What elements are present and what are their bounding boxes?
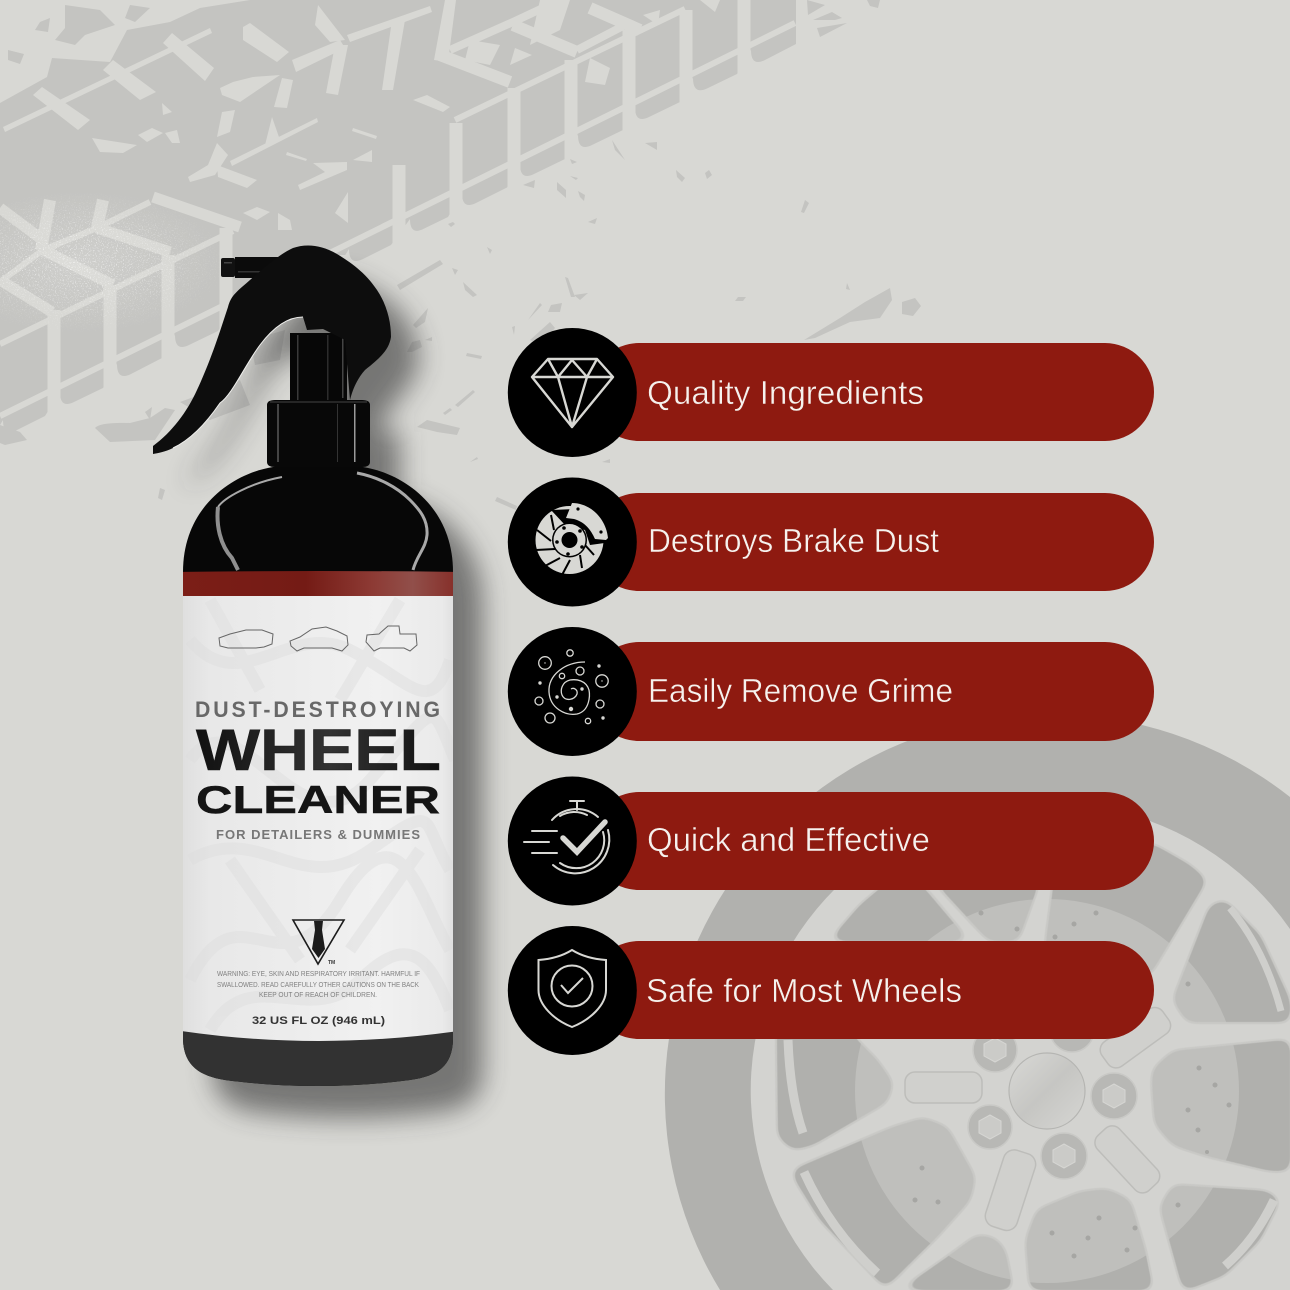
bottle base bbox=[183, 1031, 453, 1086]
wheel background bbox=[660, 714, 1290, 1290]
tire bbox=[665, 714, 1290, 1290]
product bottle bbox=[153, 246, 465, 1100]
volume text: 32 US FL OZ (946 mL) bbox=[252, 1015, 385, 1027]
rim lip bbox=[751, 802, 1290, 1290]
feature: quick and effective: Quick and Effective bbox=[647, 821, 930, 858]
coupe bbox=[290, 627, 348, 651]
light fog patch bbox=[0, 180, 240, 345]
tire track background bbox=[0, 0, 921, 510]
icon: shield check bbox=[538, 950, 606, 1027]
feature: safe for most wheels: Safe for Most Wheels bbox=[646, 972, 962, 1009]
label heading bbox=[195, 697, 443, 842]
feature: quality ingredients bbox=[508, 328, 1154, 457]
feature: quick and effective bbox=[508, 776, 1154, 906]
sedan bbox=[219, 630, 273, 648]
collar bbox=[267, 400, 370, 467]
label pattern bbox=[324, 599, 413, 1004]
logo: TM bbox=[328, 960, 335, 966]
feature: quality ingredients: Quality Ingredients bbox=[647, 374, 924, 411]
warning text: SWALLOWED. READ CAREFULLY OTHER CAUTIONS ON THE BACK bbox=[217, 980, 419, 989]
warning text: WARNING: EYE, SKIN AND RESPIRATORY IRRITANT. HARMFUL IF bbox=[217, 969, 420, 978]
logo bbox=[293, 920, 344, 966]
feature: easily remove grime bbox=[508, 627, 1154, 756]
bottle body bbox=[175, 460, 465, 1100]
window inner rim strips bbox=[788, 908, 1281, 1273]
product shadow bbox=[183, 278, 483, 1118]
icon: grime swirl bbox=[535, 650, 608, 724]
window halos bbox=[777, 835, 1290, 1290]
trigger highlight bbox=[173, 317, 303, 448]
icon: diamond bbox=[532, 359, 613, 427]
feature: safe for most wheels bbox=[508, 926, 1154, 1055]
pickup bbox=[366, 626, 417, 651]
icon: brake disc bbox=[536, 503, 612, 575]
worn patches in tread bbox=[3, 0, 807, 230]
feature: destroys brake dust bbox=[508, 478, 1154, 606]
label heading: WHEEL bbox=[196, 718, 441, 783]
label bbox=[175, 596, 465, 1041]
tread grooves bbox=[0, 0, 795, 445]
feature: easily remove grime: Easily Remove Grime bbox=[648, 672, 953, 709]
sprayer trigger bbox=[153, 246, 391, 454]
label heading: DUST-DESTROYING bbox=[195, 697, 443, 722]
sprayer nozzle bbox=[221, 257, 280, 278]
tread debris bbox=[0, 0, 921, 510]
label heading: FOR DETAILERS & DUMMIES bbox=[216, 827, 420, 842]
hub and lug nuts bbox=[905, 910, 1232, 1258]
sprayer neck bbox=[290, 333, 347, 401]
warning text: KEEP OUT OF REACH OF CHILDREN. bbox=[259, 990, 377, 999]
icon: stopwatch check bbox=[524, 801, 609, 873]
warning text bbox=[217, 969, 420, 999]
red band bbox=[183, 571, 453, 596]
wheel windows bbox=[777, 846, 1290, 1290]
feature: destroys brake dust: Destroys Brake Dust bbox=[648, 522, 939, 559]
gloss highlights bbox=[218, 473, 427, 570]
car outlines bbox=[219, 626, 417, 651]
label heading: CLEANER bbox=[196, 779, 440, 822]
